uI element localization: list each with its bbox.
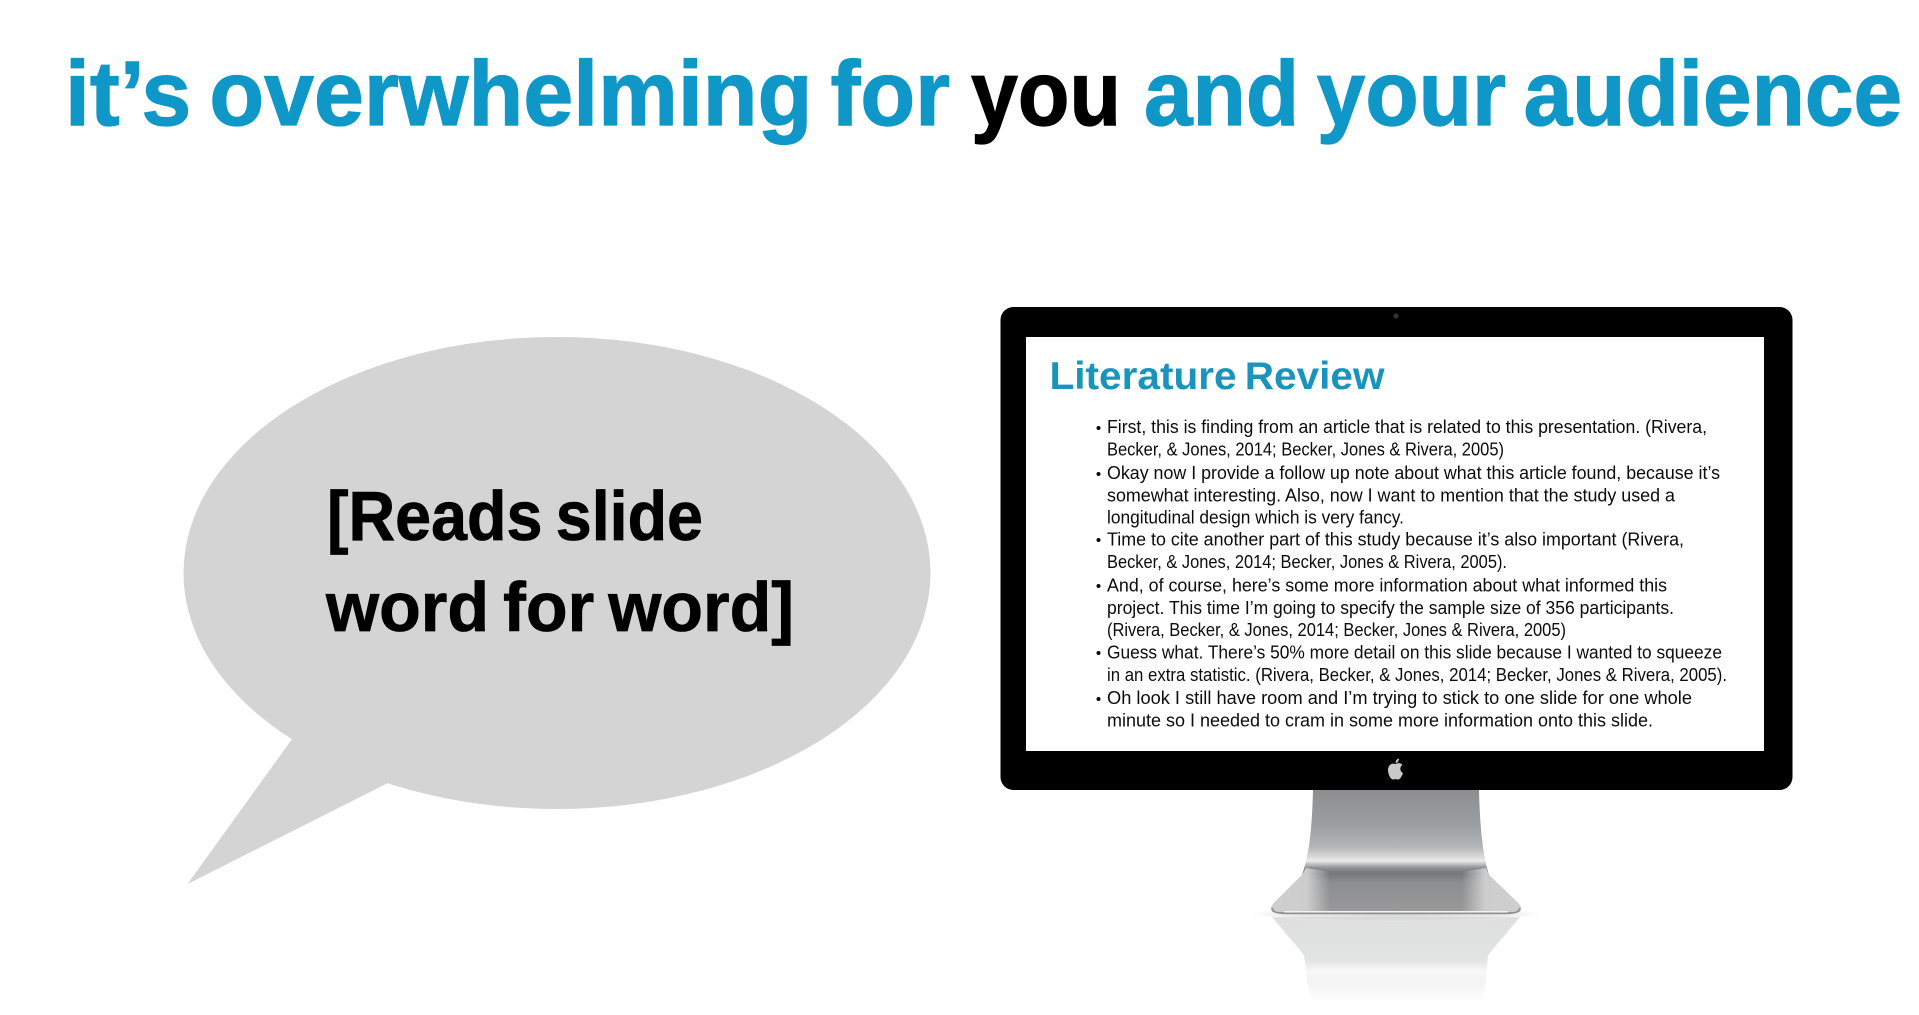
slide bullet list: in an extra statistic. (Rivera, Becker, & Jones, 2014; Becker, Jones & Rivera, 2005).: [1107, 665, 1727, 685]
bubble text: [Reads slide: [327, 477, 703, 555]
monitor bezel: [1000, 307, 1792, 790]
slide bullet list: Oh look I still have room and I’m trying to stick to one slide for one whole: [1107, 688, 1692, 708]
title: and your audience: [1144, 43, 1902, 145]
slide bullet list: Becker, & Jones, 2014; Becker, Jones & Rivera, 2005): [1107, 440, 1504, 460]
title: it’s overwhelming for: [65, 43, 950, 145]
slide heading: Literature Review: [1050, 355, 1385, 398]
title: you: [971, 43, 1121, 145]
slide bullet list: And, of course, here’s some more information about what informed this: [1107, 576, 1667, 596]
slide bullet list: Okay now I provide a follow up note about what this article found, because it’s: [1107, 463, 1720, 483]
slide screen: [1026, 337, 1764, 751]
slide bullet list: somewhat interesting. Also, now I want to mention that the study used a: [1107, 486, 1676, 506]
slide bullet list: Guess what. There’s 50% more detail on this slide because I wanted to squeeze: [1107, 642, 1722, 662]
speech bubble: [184, 337, 930, 884]
monitor stand shadow: [1241, 906, 1551, 922]
slide bullet list: [1096, 417, 1727, 730]
title: [65, 43, 1902, 145]
bubble text: word for word]: [325, 568, 794, 646]
slide bullet list: First, this is finding from an article that is related to this presentation. (Rivera,: [1107, 417, 1707, 437]
slide bullet list: (Rivera, Becker, & Jones, 2014; Becker, Jones & Rivera, 2005): [1107, 620, 1566, 640]
monitor stand reflection: [1272, 917, 1520, 1005]
camera: [1394, 314, 1398, 318]
monitor stand: [1271, 790, 1521, 914]
slide bullet list: longitudinal design which is very fancy.: [1107, 508, 1404, 528]
slide bullet list: project. This time I’m going to specify the sample size of 356 participants.: [1107, 598, 1674, 618]
monitor: [1000, 307, 1792, 1005]
slide bullet list: Becker, & Jones, 2014; Becker, Jones & Rivera, 2005).: [1107, 552, 1507, 572]
apple logo: [1388, 758, 1403, 780]
slide bullet list: minute so I needed to cram in some more information onto this slide.: [1107, 710, 1653, 730]
slide bullet list: Time to cite another part of this study because it’s also important (Rivera,: [1107, 530, 1684, 550]
bubble text: [325, 477, 794, 646]
